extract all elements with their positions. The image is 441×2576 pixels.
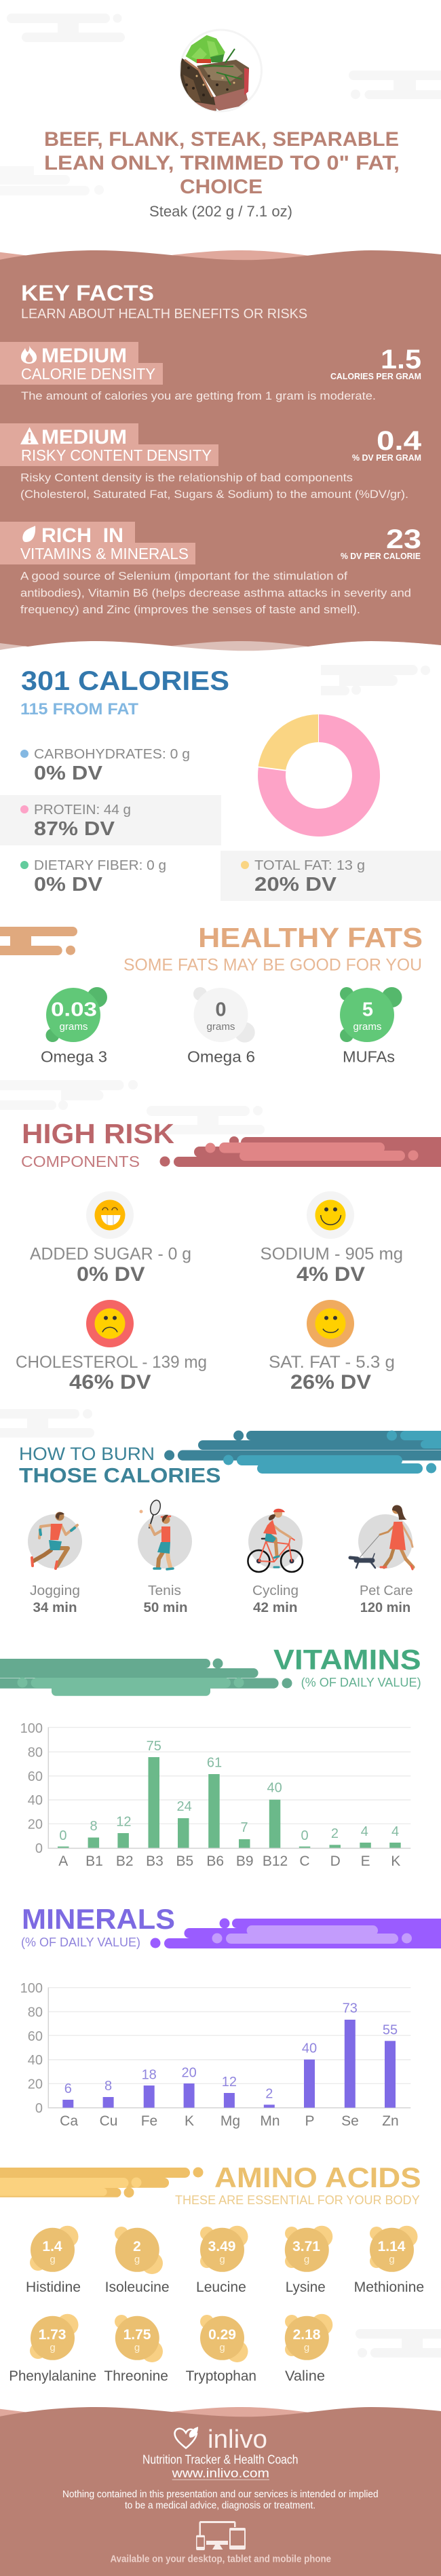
amino acid: phenylalanine — [9, 2314, 96, 2384]
bar chart: vitamins: B9 — [236, 1853, 254, 1869]
icon: warning triangle — [20, 427, 39, 444]
footer website: www.inlivo.com — [172, 2467, 269, 2480]
background cloud: above high risk — [0, 1080, 138, 1110]
nutrient: protein — [0, 795, 221, 845]
amino acid: lysine: 3.71 — [292, 2239, 320, 2254]
bar chart: vitamins: 4 — [391, 1824, 399, 1839]
key fact: vitamins and minerals: 23 — [386, 524, 421, 554]
amino acid: histidine: 1.4 — [42, 2239, 62, 2254]
amino acid: leucine: 3.49 — [208, 2239, 235, 2254]
food photo: steak with salad — [180, 30, 262, 112]
nutrient: dietary fiber — [20, 858, 166, 896]
nutrient: dietary fiber: 0% DV — [34, 874, 103, 896]
bar chart: vitamins: E — [361, 1853, 370, 1869]
bar chart: vitamins: B6 — [206, 1853, 224, 1869]
amino acid: threonine: g — [134, 2342, 140, 2353]
bar chart: vitamins: 75 — [147, 1739, 161, 1754]
background cloud: middle left — [0, 166, 104, 195]
footer disclaimer: Nothing contained in this presentation and our services is intended or implied — [62, 2488, 379, 2500]
amino acid: tryptophan: Tryptophan — [186, 2368, 256, 2384]
bar chart: minerals: 20 — [181, 2066, 197, 2081]
bar chart: vitamins: 0 — [59, 1828, 66, 1843]
decorative banner: how to burn — [164, 1430, 441, 1474]
amino acid: leucine — [196, 2226, 248, 2295]
bar chart: vitamins — [20, 1721, 410, 1869]
icon: sad face — [95, 1308, 125, 1339]
panel: key facts background with waves — [0, 250, 441, 651]
decorative banner: high risk — [160, 1136, 441, 1167]
nutrient: carbohydrates — [20, 747, 190, 784]
key fact: risky content density: MEDIUM — [41, 426, 127, 448]
bar chart: vitamins: B12 — [263, 1853, 288, 1869]
activity: cycling: Cycling — [252, 1583, 299, 1598]
amino acid: valine: 2.18 — [293, 2327, 321, 2343]
decorative banner: vitamins — [0, 1658, 292, 1696]
bar chart: minerals: 0 — [35, 2101, 43, 2116]
key fact: vitamins and minerals: frequency) and Zinc (improves the senses of taste and smell). — [20, 603, 360, 616]
heading: minerals: MINERALS — [22, 1903, 175, 1935]
bar chart: vitamins: B5 — [176, 1853, 193, 1869]
bar chart: vitamins: 61 — [207, 1755, 222, 1770]
bar chart: minerals: 8 — [104, 2079, 112, 2094]
fat: omega 6: Omega 6 — [187, 1048, 255, 1066]
background cloud: behind high risk — [147, 1106, 265, 1134]
key fact: calorie density: The amount of calories you are getting from 1 gram is moderate. — [21, 389, 376, 402]
amino acid: lysine: Lysine — [286, 2280, 326, 2295]
icon: flame — [21, 345, 37, 364]
key fact: risky content density: % DV PER GRAM — [352, 453, 421, 463]
activity: cycling — [248, 1509, 303, 1615]
risk item: saturated fat: SAT. FAT - 5.3 g — [269, 1353, 395, 1372]
amino acid: histidine: Histidine — [26, 2280, 81, 2295]
bar chart: vitamins: D — [330, 1853, 341, 1869]
footer disclaimer: to be a medical advice, diagnosis or treatment. — [125, 2500, 315, 2512]
amino acid: methionine — [354, 2226, 424, 2295]
fat: omega 6 — [187, 987, 255, 1066]
bar chart: minerals: 40 — [28, 2053, 43, 2068]
amino acid: threonine: 1.75 — [123, 2327, 151, 2343]
heading: healthy fats: HEALTHY FATS — [198, 922, 423, 953]
bar chart: vitamins: B3 — [146, 1853, 164, 1869]
activity: cycling: 42 min — [253, 1600, 297, 1615]
icon: woman walking dog — [350, 1505, 413, 1569]
bar chart: vitamins: 12 — [116, 1815, 132, 1830]
amino acid: leucine: g — [219, 2254, 225, 2265]
risk item: cholesterol — [16, 1300, 207, 1393]
heading: minerals — [21, 1903, 175, 1949]
nutrient: protein: 87% DV — [34, 818, 115, 840]
key fact: calorie density: CALORIES PER GRAM — [330, 372, 421, 381]
title: LEAN ONLY, TRIMMED TO 0" FAT, — [44, 152, 400, 174]
background cloud: bottom right — [356, 2329, 441, 2358]
footer availability note: Available on your desktop, tablet and mobile phone — [110, 2554, 331, 2565]
bar chart: vitamins: 24 — [176, 1799, 192, 1814]
key fact: vitamins and minerals: A good source of Selenium (important for the stimulation of — [20, 570, 347, 582]
bar chart: minerals: 60 — [28, 2029, 43, 2044]
heading: vitamins: VITAMINS — [273, 1644, 421, 1676]
nutrient: total fat: TOTAL FAT: 13 g — [254, 858, 365, 873]
amino acid: threonine — [104, 2315, 168, 2384]
amino acid: methionine: Methionine — [354, 2280, 424, 2295]
amino acid: valine — [285, 2314, 332, 2384]
bar chart: vitamins: 0 — [301, 1828, 309, 1843]
bar chart: minerals: Cu — [100, 2113, 117, 2129]
bar chart: minerals: Zn — [382, 2113, 399, 2129]
icon: jogger — [32, 1512, 77, 1569]
heading: high risk components: HIGH RISK — [22, 1118, 174, 1149]
heading: key facts — [21, 281, 307, 322]
bar chart: minerals — [20, 1981, 410, 2129]
amino acid: isoleucine — [105, 2227, 170, 2295]
bar chart: vitamins: B1 — [85, 1853, 103, 1869]
key fact: risky content density: 0.4 — [377, 426, 422, 456]
fat: omega 3: Omega 3 — [41, 1048, 107, 1066]
heading: amino acids — [175, 2161, 421, 2207]
fat: MUFAs: MUFAs — [343, 1048, 395, 1066]
activity: jogging: Jogging — [30, 1583, 80, 1598]
bar chart: minerals: 12 — [222, 2075, 237, 2090]
bar chart: minerals: Fe — [141, 2113, 157, 2129]
key fact: vitamins and minerals: RICH IN — [41, 524, 123, 547]
key fact: calorie density: CALORIE DENSITY — [21, 365, 155, 383]
heading: minerals: (% OF DAILY VALUE) — [21, 1935, 140, 1949]
key fact: calorie density: MEDIUM — [41, 345, 127, 367]
icon: tennis player — [140, 1499, 173, 1569]
footer panel with wave — [0, 2407, 441, 2576]
heading: how to burn those calories: HOW TO BURN — [19, 1444, 155, 1464]
nutrient: dietary fiber: DIETARY FIBER: 0 g — [34, 858, 166, 873]
fat: omega 3: grams — [60, 1021, 88, 1033]
decorative banner: minerals — [151, 1919, 441, 1948]
heading: key facts: KEY FACTS — [21, 281, 154, 305]
activity: tennis — [138, 1499, 192, 1615]
bar chart: minerals: Mn — [260, 2113, 280, 2129]
amino acid: tryptophan: 0.29 — [208, 2327, 236, 2343]
bar chart: minerals: 20 — [28, 2077, 43, 2092]
bar chart: vitamins: B2 — [116, 1853, 134, 1869]
background cloud: top right — [349, 71, 441, 99]
serving size: Steak (202 g / 7.1 oz) — [149, 203, 292, 220]
icon: cyclist — [248, 1509, 303, 1572]
risk item: cholesterol: 46% DV — [69, 1371, 151, 1393]
amino acid: tryptophan — [186, 2315, 256, 2384]
footer tagline: Nutrition Tracker & Health Coach — [142, 2453, 299, 2467]
nutrient: total fat: 20% DV — [254, 874, 337, 896]
risk item: saturated fat — [269, 1300, 395, 1393]
amino acid: lysine — [285, 2226, 332, 2295]
nutrient: carbohydrates: CARBOHYDRATES: 0 g — [34, 747, 190, 762]
heading: how to burn those calories — [19, 1444, 221, 1487]
risk item: sodium: 4% DV — [296, 1263, 365, 1286]
key fact: risky content density: (Cholesterol, Saturated Fat, Sugars & Sodium) to the amount (%DV/gr). — [20, 488, 408, 501]
bar chart: vitamins: 40 — [267, 1781, 282, 1796]
key fact: vitamins and minerals — [0, 522, 421, 616]
bar chart: vitamins: 20 — [28, 1817, 43, 1832]
fat: omega 6: 0 — [215, 999, 227, 1020]
bar chart: minerals: K — [185, 2113, 194, 2129]
heading: high risk components — [21, 1118, 174, 1170]
key fact: calorie density — [0, 342, 421, 402]
fat: MUFAs: grams — [353, 1021, 381, 1033]
risk item: added sugar: 0% DV — [77, 1263, 145, 1286]
background cloud: above burn section — [0, 1409, 94, 1438]
donut chart: calorie sources — [258, 714, 380, 837]
amino acid: valine: Valine — [285, 2368, 325, 2384]
key fact: vitamins and minerals: antibodies), Vitamin B6 (helps decrease asthma attacks in severity and — [20, 586, 411, 599]
bar chart: minerals: 55 — [383, 2022, 398, 2037]
amino acid: valine: g — [304, 2342, 309, 2353]
bar chart: vitamins: 100 — [20, 1721, 43, 1736]
title: BEEF, FLANK, STEAK, SEPARABLE — [44, 128, 399, 151]
heading: healthy fats: SOME FATS MAY BE GOOD FOR YOU — [123, 955, 422, 974]
activity: pet care — [350, 1505, 413, 1615]
bar chart: minerals: 73 — [343, 2001, 358, 2016]
nutrient: protein: PROTEIN: 44 g — [34, 803, 131, 818]
amino acid: isoleucine: g — [134, 2254, 140, 2265]
footer disclaimer — [62, 2488, 379, 2512]
activity: tennis: 50 min — [144, 1600, 187, 1615]
fat: omega 3 — [41, 987, 107, 1066]
fat: omega 6: grams — [206, 1021, 235, 1033]
icon: leaf — [22, 526, 35, 542]
heading: vitamins: (% OF DAILY VALUE) — [301, 1675, 421, 1689]
risk item: added sugar: ADDED SUGAR - 0 g — [30, 1244, 191, 1263]
bar chart: minerals: 2 — [265, 2086, 273, 2101]
risk item: saturated fat: 26% DV — [290, 1371, 371, 1393]
icon: devices — [196, 2521, 246, 2550]
activity: pet care: Pet Care — [360, 1583, 413, 1598]
risk item: sodium: SODIUM - 905 mg — [261, 1244, 403, 1263]
amino acid: lysine: g — [304, 2254, 309, 2265]
bar chart: minerals: Mg — [220, 2113, 240, 2129]
bar chart: minerals: 6 — [64, 2081, 72, 2096]
bar chart: minerals: Ca — [60, 2113, 78, 2129]
bar chart: minerals: 18 — [142, 2067, 157, 2082]
title: CHOICE — [180, 176, 263, 198]
bar chart: vitamins: C — [299, 1853, 310, 1869]
icon: smiling face — [315, 1199, 346, 1231]
icon: slight smile face — [315, 1308, 346, 1339]
risk item: sodium — [261, 1191, 403, 1286]
logo: inlivo — [175, 2425, 267, 2454]
amino acid: phenylalanine: g — [50, 2342, 56, 2353]
heading: key facts: LEARN ABOUT HEALTH BENEFITS OR RISKS — [21, 307, 307, 322]
bar chart: minerals: 80 — [28, 2005, 43, 2020]
activity: jogging — [28, 1512, 82, 1615]
amino acid: leucine: Leucine — [196, 2280, 246, 2295]
amino acid: phenylalanine: Phenylalanine — [9, 2368, 96, 2384]
bar chart: vitamins: 2 — [331, 1826, 339, 1841]
bar chart: vitamins: 7 — [240, 1820, 248, 1835]
decorative banner: healthy fats — [0, 927, 77, 955]
heading: amino acids: AMINO ACIDS — [214, 2161, 421, 2193]
key fact: risky content density: RISKY CONTENT DENSITY — [21, 446, 212, 464]
heading: amino acids: THESE ARE ESSENTIAL FOR YOUR BODY — [175, 2193, 420, 2207]
heading: calories: 301 CALORIES — [21, 666, 229, 696]
heading: healthy fats — [123, 922, 423, 974]
fat: MUFAs: 5 — [362, 999, 373, 1020]
bar chart: vitamins: 80 — [28, 1745, 43, 1760]
activity: pet care: 120 min — [360, 1600, 410, 1615]
bar chart: minerals: P — [305, 2113, 315, 2129]
nutrient: total fat — [220, 851, 441, 901]
heading: vitamins — [273, 1644, 421, 1689]
fat: omega 3: 0.03 — [51, 999, 97, 1020]
key fact: risky content density: Risky Content density is the relationship of bad components — [20, 471, 353, 484]
background cloud: top left — [0, 14, 125, 42]
amino acid: histidine — [26, 2226, 81, 2295]
heading: calories — [20, 666, 229, 718]
risk item: cholesterol: CHOLESTEROL - 139 mg — [16, 1353, 207, 1372]
amino acid: isoleucine: 2 — [133, 2239, 141, 2254]
key fact: vitamins and minerals: % DV PER CALORIE — [341, 552, 421, 561]
heading: calories: 115 FROM FAT — [20, 700, 138, 718]
amino acid: phenylalanine: 1.73 — [39, 2327, 66, 2343]
bar chart: vitamins: A — [58, 1853, 68, 1869]
key fact: calorie density: 1.5 — [381, 345, 421, 374]
title — [44, 128, 400, 198]
decorative banner: amino acids — [0, 2167, 204, 2197]
amino acid: threonine: Threonine — [104, 2368, 168, 2384]
bar chart: vitamins: 4 — [361, 1824, 368, 1839]
fat: MUFAs — [340, 987, 402, 1066]
logo: inlivo: inlivo — [208, 2425, 267, 2454]
background cloud: calories — [321, 665, 430, 695]
key fact: risky content density — [0, 423, 422, 501]
amino acid: methionine: g — [389, 2254, 395, 2265]
amino acid: methionine: 1.14 — [378, 2239, 406, 2254]
heading: high risk components: COMPONENTS — [21, 1153, 140, 1170]
amino acid: histidine: g — [50, 2254, 56, 2265]
icon: grinning face — [95, 1199, 125, 1231]
activity: jogging: 34 min — [33, 1600, 77, 1615]
bar chart: vitamins: K — [391, 1853, 400, 1869]
bar chart: vitamins: 8 — [90, 1819, 98, 1834]
bar chart: minerals: Se — [341, 2113, 359, 2129]
activity: tennis: Tenis — [148, 1583, 181, 1598]
heading: how to burn those calories: THOSE CALORIES — [19, 1463, 221, 1487]
bar chart: minerals: 40 — [302, 2041, 317, 2056]
bar chart: vitamins: 0 — [35, 1841, 43, 1856]
key fact: vitamins and minerals: VITAMINS & MINERALS — [20, 545, 189, 562]
bar chart: vitamins: 40 — [28, 1793, 43, 1808]
amino acid: isoleucine: Isoleucine — [105, 2280, 170, 2295]
bar chart: vitamins: 60 — [28, 1769, 43, 1784]
amino acid: tryptophan: g — [219, 2342, 225, 2353]
bar chart: minerals: 100 — [20, 1981, 43, 1996]
nutrient: carbohydrates: 0% DV — [34, 763, 103, 784]
risk item: added sugar — [30, 1191, 191, 1286]
